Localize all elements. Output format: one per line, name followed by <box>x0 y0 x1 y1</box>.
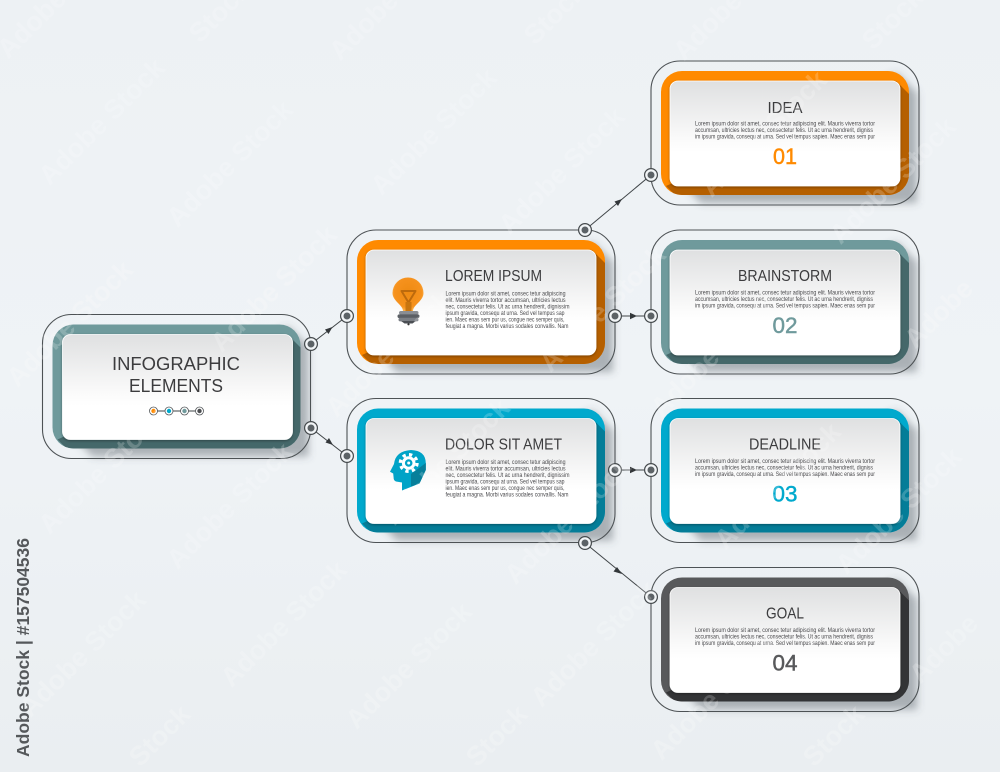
watermark pattern: Adobe Stock <box>534 239 672 378</box>
progress dots <box>150 407 204 415</box>
watermark pattern: Adobe Stock <box>205 219 343 358</box>
watermark pattern: Adobe Stock <box>830 441 968 580</box>
panel: brainstorm <box>650 230 922 376</box>
icon: head with gear <box>390 450 426 490</box>
text block: nec, consectetur felis. Ut ac urna hendrerit, dignissim <box>446 472 570 479</box>
watermark pattern: Adobe Stock <box>33 52 171 191</box>
text block: accumsan, ultricies lectus nec, consectetur felis. Ut ac urna hendrerit, digniss <box>695 296 874 303</box>
watermark pattern: Adobe Stock <box>340 596 478 735</box>
panel: deadline <box>650 398 922 545</box>
watermark pattern: Adobe Stock <box>320 284 458 423</box>
number: 02 <box>772 313 798 338</box>
arrow: lorem ipsum to idea <box>585 175 651 230</box>
text block: ipsum gravida, consequ at urna. Sed vel tempus sap <box>446 479 565 486</box>
watermark pattern: Adobe Stock <box>365 62 503 201</box>
watermark pattern: Adobe Stock <box>161 94 299 233</box>
side credit text: Adobe Stock | #157504536 <box>13 538 33 757</box>
text block: Lorem ipsum dolor sit amet, consec tetur adipiscing <box>446 290 566 298</box>
heading: BRAINSTORM <box>738 268 832 285</box>
watermark pattern: Adobe Stock <box>378 392 516 531</box>
arrow: dolor sit amet to deadline <box>615 467 651 473</box>
watermark pattern: Stock <box>123 698 197 772</box>
watermark pattern: Adobe Stock <box>1 254 139 393</box>
arrow: dolor sit amet to goal <box>585 543 651 597</box>
text block: Lorem ipsum dolor sit amet, consec tetur adipiscing elit. Mauris viverra tortor <box>695 120 876 128</box>
heading <box>112 354 240 396</box>
text block: feugiat a magna. Morbi varius sodales convallis. Nam <box>446 323 569 330</box>
text block <box>695 627 876 647</box>
watermark pattern: Adobe Stock <box>525 574 663 713</box>
panel: idea <box>650 60 922 208</box>
number: 03 <box>772 482 798 506</box>
arrow: main to lorem ipsum <box>311 316 347 344</box>
watermark pattern: Adobe Stock <box>645 284 783 423</box>
text block: Lorem ipsum dolor sit amet, consec tetur adipiscing <box>446 459 566 466</box>
text block: accumsan, ultricies lectus nec, consectetur felis. Ut ac urna hendrerit, digniss <box>695 634 874 640</box>
watermark pattern: Adobe Stock <box>709 416 847 555</box>
heading: LOREM IPSUM <box>445 268 542 285</box>
watermark pattern: Stock <box>460 698 534 772</box>
panel: dolor sit amet <box>346 398 618 545</box>
watermark pattern: Stock <box>797 698 871 772</box>
text block: ipsum gravida, consequ at urna. Sed vel tempus sap <box>446 310 565 317</box>
heading: GOAL <box>766 606 804 622</box>
text block <box>446 290 570 330</box>
text block <box>695 120 876 140</box>
watermark pattern: Adobe Stock <box>161 436 299 575</box>
number: 01 <box>773 144 797 169</box>
text block: Lorem ipsum dolor sit amet, consec tetur adipiscing elit. Mauris viverra tortor <box>695 627 876 634</box>
heading: DEADLINE <box>749 436 821 454</box>
text block <box>695 458 876 478</box>
panel: infographic elements <box>42 314 313 461</box>
watermark pattern: Adobe Stock <box>499 451 637 590</box>
text block: accumsan, ultricies lectus nec, consectetur felis. Ut ac urna hendrerit, digniss <box>695 127 874 134</box>
arrow: lorem ipsum to brainstorm <box>615 313 651 319</box>
heading: DOLOR SIT AMET <box>445 436 562 454</box>
text block: im ipsum gravida, consequ at urna. Sed vel tempus sapien. Maec enas sem pur <box>695 302 876 310</box>
watermark pattern: Adobe Stock <box>215 554 353 693</box>
watermark pattern: Adobe <box>903 608 984 689</box>
text block: im ipsum gravida, consequ at urna. Sed vel tempus sapien. Maec enas sem pur <box>695 471 876 478</box>
text block: elit. Mauris viverra tortor accumsan, ultricies lectus <box>446 466 566 472</box>
watermark pattern: Adobe <box>898 273 979 354</box>
heading: ELEMENTS <box>129 376 223 396</box>
watermark pattern: Adobe Stock <box>645 627 783 766</box>
heading: IDEA <box>768 100 803 117</box>
text block <box>695 290 876 310</box>
text block: im ipsum gravida, consequ at urna. Sed vel tempus sapien. Maec enas sem pur <box>695 640 876 647</box>
text block: ien. Maec enas sem pur us, congue nec semper quis, <box>446 485 565 492</box>
text block: accumsan, ultricies lectus nec, consectetur felis. Ut ac urna hendrerit, digniss <box>695 464 874 472</box>
watermark pattern: Adobe Stock <box>493 101 631 240</box>
text block: Lorem ipsum dolor sit amet, consec tetur adipiscing elit. Mauris viverra tortor <box>695 458 876 465</box>
panel: goal <box>650 567 922 714</box>
icon: light bulb <box>392 278 424 325</box>
watermark pattern: Adobe Stock <box>824 111 962 250</box>
text block: feugiat a magna. Morbi varius sodales convallis. Nam <box>446 492 569 499</box>
text block: elit. Mauris viverra tortor accumsan, ultricies lectus <box>446 297 566 304</box>
text block <box>446 459 570 499</box>
text block: im ipsum gravida, consequ at urna. Sed vel tempus sapien. Maec enas sem pur <box>695 134 876 140</box>
heading: INFOGRAPHIC <box>112 354 240 374</box>
connector nodes <box>305 169 657 603</box>
arrow: main to dolor sit amet <box>311 428 347 456</box>
watermark pattern: Adobe Stock <box>14 584 152 723</box>
watermark pattern: Adobe Stock <box>695 64 833 203</box>
watermark pattern: Adobe Stock <box>33 401 171 540</box>
number: 04 <box>772 650 798 676</box>
text block: nec, consectetur felis. Ut ac urna hendrerit, dignissim <box>446 304 570 311</box>
panel: lorem ipsum <box>346 230 618 376</box>
text block: ien. Maec enas sem pur us, congue nec semper quis, <box>446 317 565 324</box>
text block: Lorem ipsum dolor sit amet, consec tetur adipiscing elit. Mauris viverra tortor <box>695 290 876 296</box>
